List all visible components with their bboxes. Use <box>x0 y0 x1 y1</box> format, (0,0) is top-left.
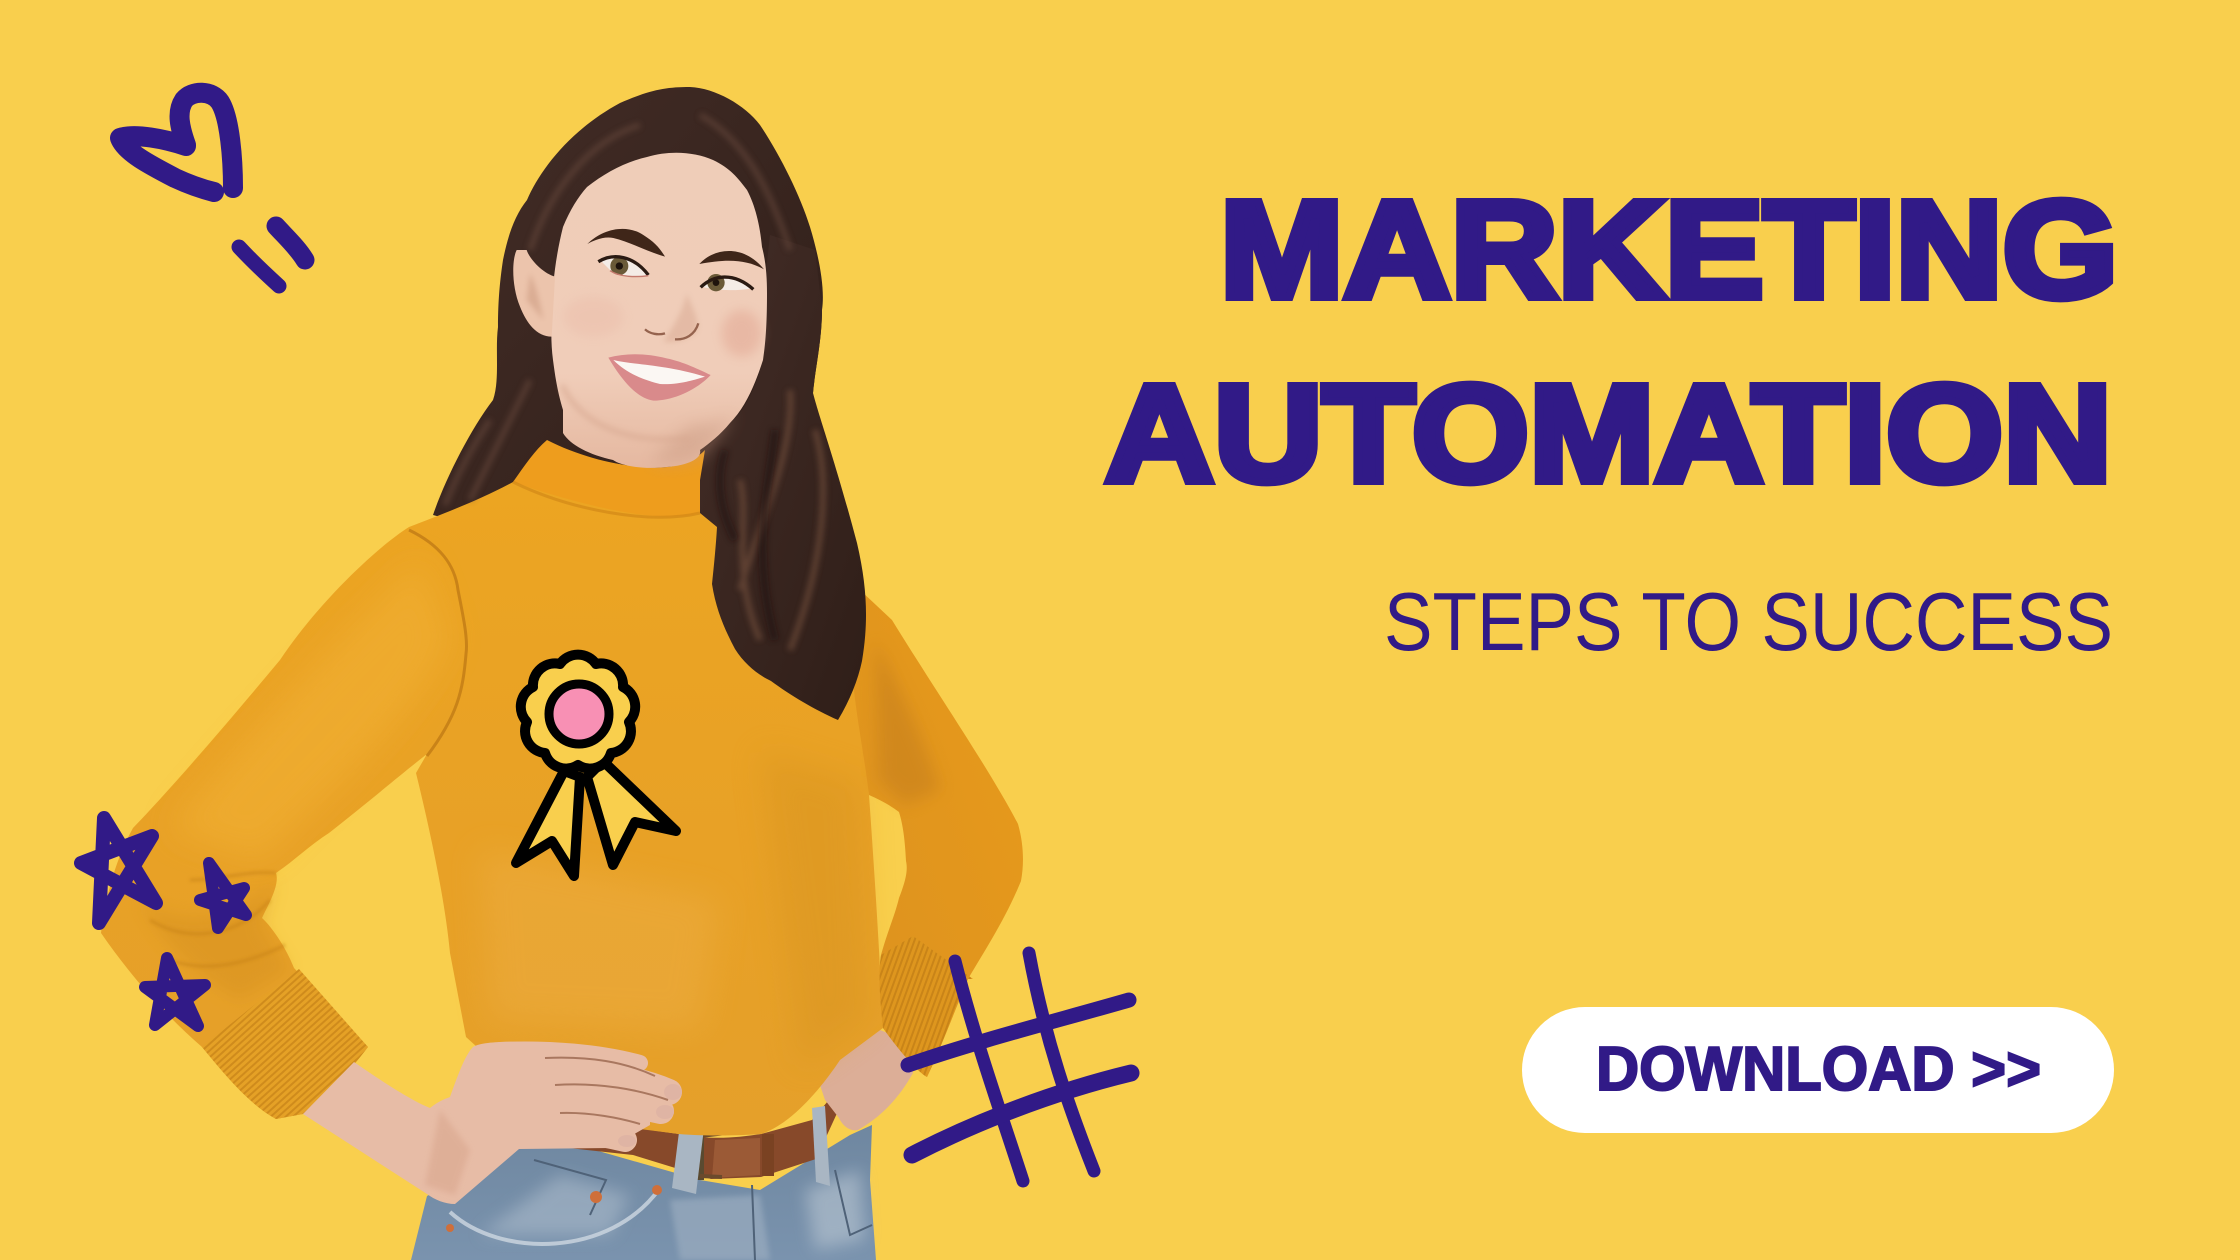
horizontal stroke bottom <box>912 1073 1131 1155</box>
icon: hand-drawn heart with dashes <box>120 93 305 286</box>
right hand <box>816 1028 913 1130</box>
ear shadow <box>527 273 543 320</box>
jaw line shadow <box>562 385 690 439</box>
heart <box>120 93 233 192</box>
subtitle: STEPS TO SUCCESS <box>1384 575 2113 668</box>
icon: hand-drawn stars <box>81 818 246 1026</box>
ribbon left tail <box>516 771 580 876</box>
right cuff <box>880 936 973 1077</box>
middle star <box>200 863 246 928</box>
button label: DOWNLOAD >> <box>1596 1035 2041 1104</box>
right brow <box>699 251 764 269</box>
ribbon right tail <box>587 761 676 865</box>
left cuff <box>202 969 368 1119</box>
vertical stroke right <box>1029 953 1094 1171</box>
large star <box>81 818 156 923</box>
turtleneck collar <box>513 440 705 517</box>
back hair <box>433 87 823 560</box>
hair highlights left <box>445 115 790 505</box>
download button <box>1522 1007 2114 1133</box>
horizontal stroke top <box>908 1000 1129 1065</box>
title line two: AUTOMATION <box>1105 357 2112 511</box>
woman in mustard sweater <box>101 87 1023 1260</box>
collar crease <box>513 482 700 517</box>
left brow <box>587 229 665 257</box>
left hand and forearm <box>303 1042 682 1204</box>
neck and face <box>551 153 767 468</box>
front-right hair <box>700 235 866 720</box>
icon: hand-drawn hash <box>908 953 1131 1181</box>
ear <box>513 250 555 337</box>
sleeve seam <box>409 530 467 756</box>
title <box>1105 173 2118 511</box>
left sleeve folds <box>140 880 290 1000</box>
button pill <box>1522 1007 2114 1133</box>
right sleeve shading <box>875 640 940 805</box>
pink centre <box>549 684 609 744</box>
left sleeve highlight <box>170 560 450 860</box>
torso and left sleeve <box>101 480 883 1136</box>
left eye <box>598 257 648 277</box>
jeans <box>411 1125 876 1260</box>
mouth <box>608 354 711 401</box>
leather belt <box>550 1069 855 1194</box>
right cheek blush <box>722 310 762 357</box>
rosette <box>521 655 635 769</box>
right eye <box>701 274 753 291</box>
cheek blush <box>563 297 623 337</box>
fold lines <box>150 872 285 966</box>
torso shading <box>760 750 870 1070</box>
fingers <box>500 1050 669 1140</box>
icon: award ribbon badge <box>516 655 676 876</box>
nose <box>645 293 698 342</box>
dash one <box>276 226 305 260</box>
dash two <box>239 247 279 286</box>
right sleeve <box>851 590 1023 1077</box>
title line one: MARKETING <box>1220 173 2118 327</box>
facial features <box>513 229 764 401</box>
neck shadow <box>650 415 735 463</box>
vertical stroke left <box>955 961 1023 1181</box>
small star <box>145 958 205 1026</box>
torso lower highlight <box>480 850 720 1030</box>
